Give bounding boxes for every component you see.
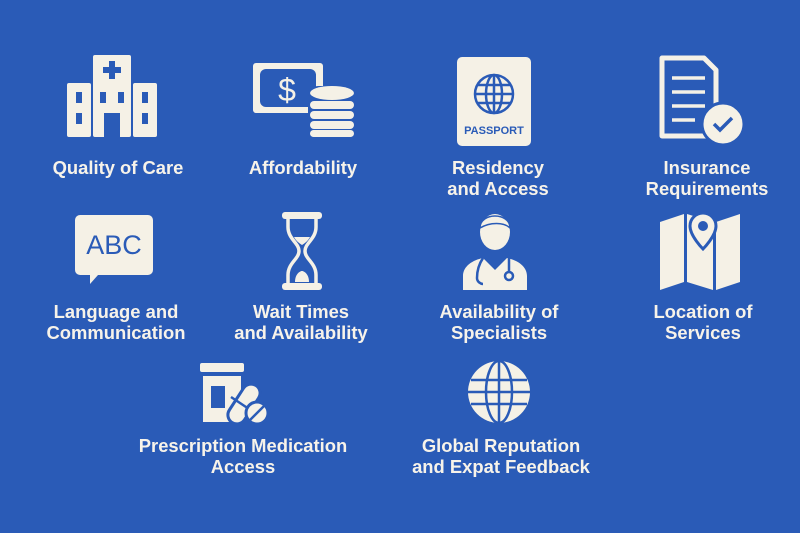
label: affordability: Affordability	[249, 157, 357, 178]
label: specialists	[440, 301, 558, 343]
label: wait times	[234, 301, 368, 343]
label: prescription: Access	[211, 456, 275, 477]
icon: passport: PASSPORT	[464, 125, 524, 137]
label: global reputation: Global Reputation	[422, 435, 580, 456]
label: global reputation	[412, 435, 590, 477]
icon: ABC bubble	[75, 215, 153, 284]
label: location	[653, 301, 753, 343]
label: quality of care: Quality of Care	[53, 157, 183, 178]
icon: money	[253, 63, 356, 138]
icon: ABC bubble: ABC	[86, 230, 142, 260]
label: specialists: Availability of	[440, 301, 558, 322]
label: specialists: Specialists	[451, 322, 547, 343]
label: wait times: and Availability	[234, 322, 368, 343]
label: language	[47, 301, 185, 343]
icon: doctor	[463, 214, 527, 290]
icon: globe	[468, 361, 530, 423]
icon: hospital	[67, 55, 157, 137]
label: wait times: Wait Times	[253, 301, 349, 322]
label: prescription	[139, 435, 347, 477]
label: location: Location of	[653, 301, 753, 322]
label: residency: Residency	[452, 157, 544, 178]
label: language: Communication	[47, 322, 185, 343]
label: global reputation: and Expat Feedback	[412, 456, 590, 477]
icon: money: $	[278, 72, 296, 108]
icon: map pin	[660, 213, 740, 290]
icon: passport	[457, 57, 531, 146]
label: language: Language and	[54, 301, 178, 322]
label: insurance	[646, 157, 768, 199]
label: insurance: Insurance	[664, 157, 750, 178]
label: residency	[447, 157, 549, 199]
icon: pill bottle	[200, 363, 268, 427]
label: insurance: Requirements	[646, 178, 768, 199]
icon: hourglass	[282, 212, 322, 290]
label: residency: and Access	[447, 178, 549, 199]
icon: document check	[662, 58, 744, 145]
label: location: Services	[665, 322, 741, 343]
label: prescription: Prescription Medication	[139, 435, 347, 456]
